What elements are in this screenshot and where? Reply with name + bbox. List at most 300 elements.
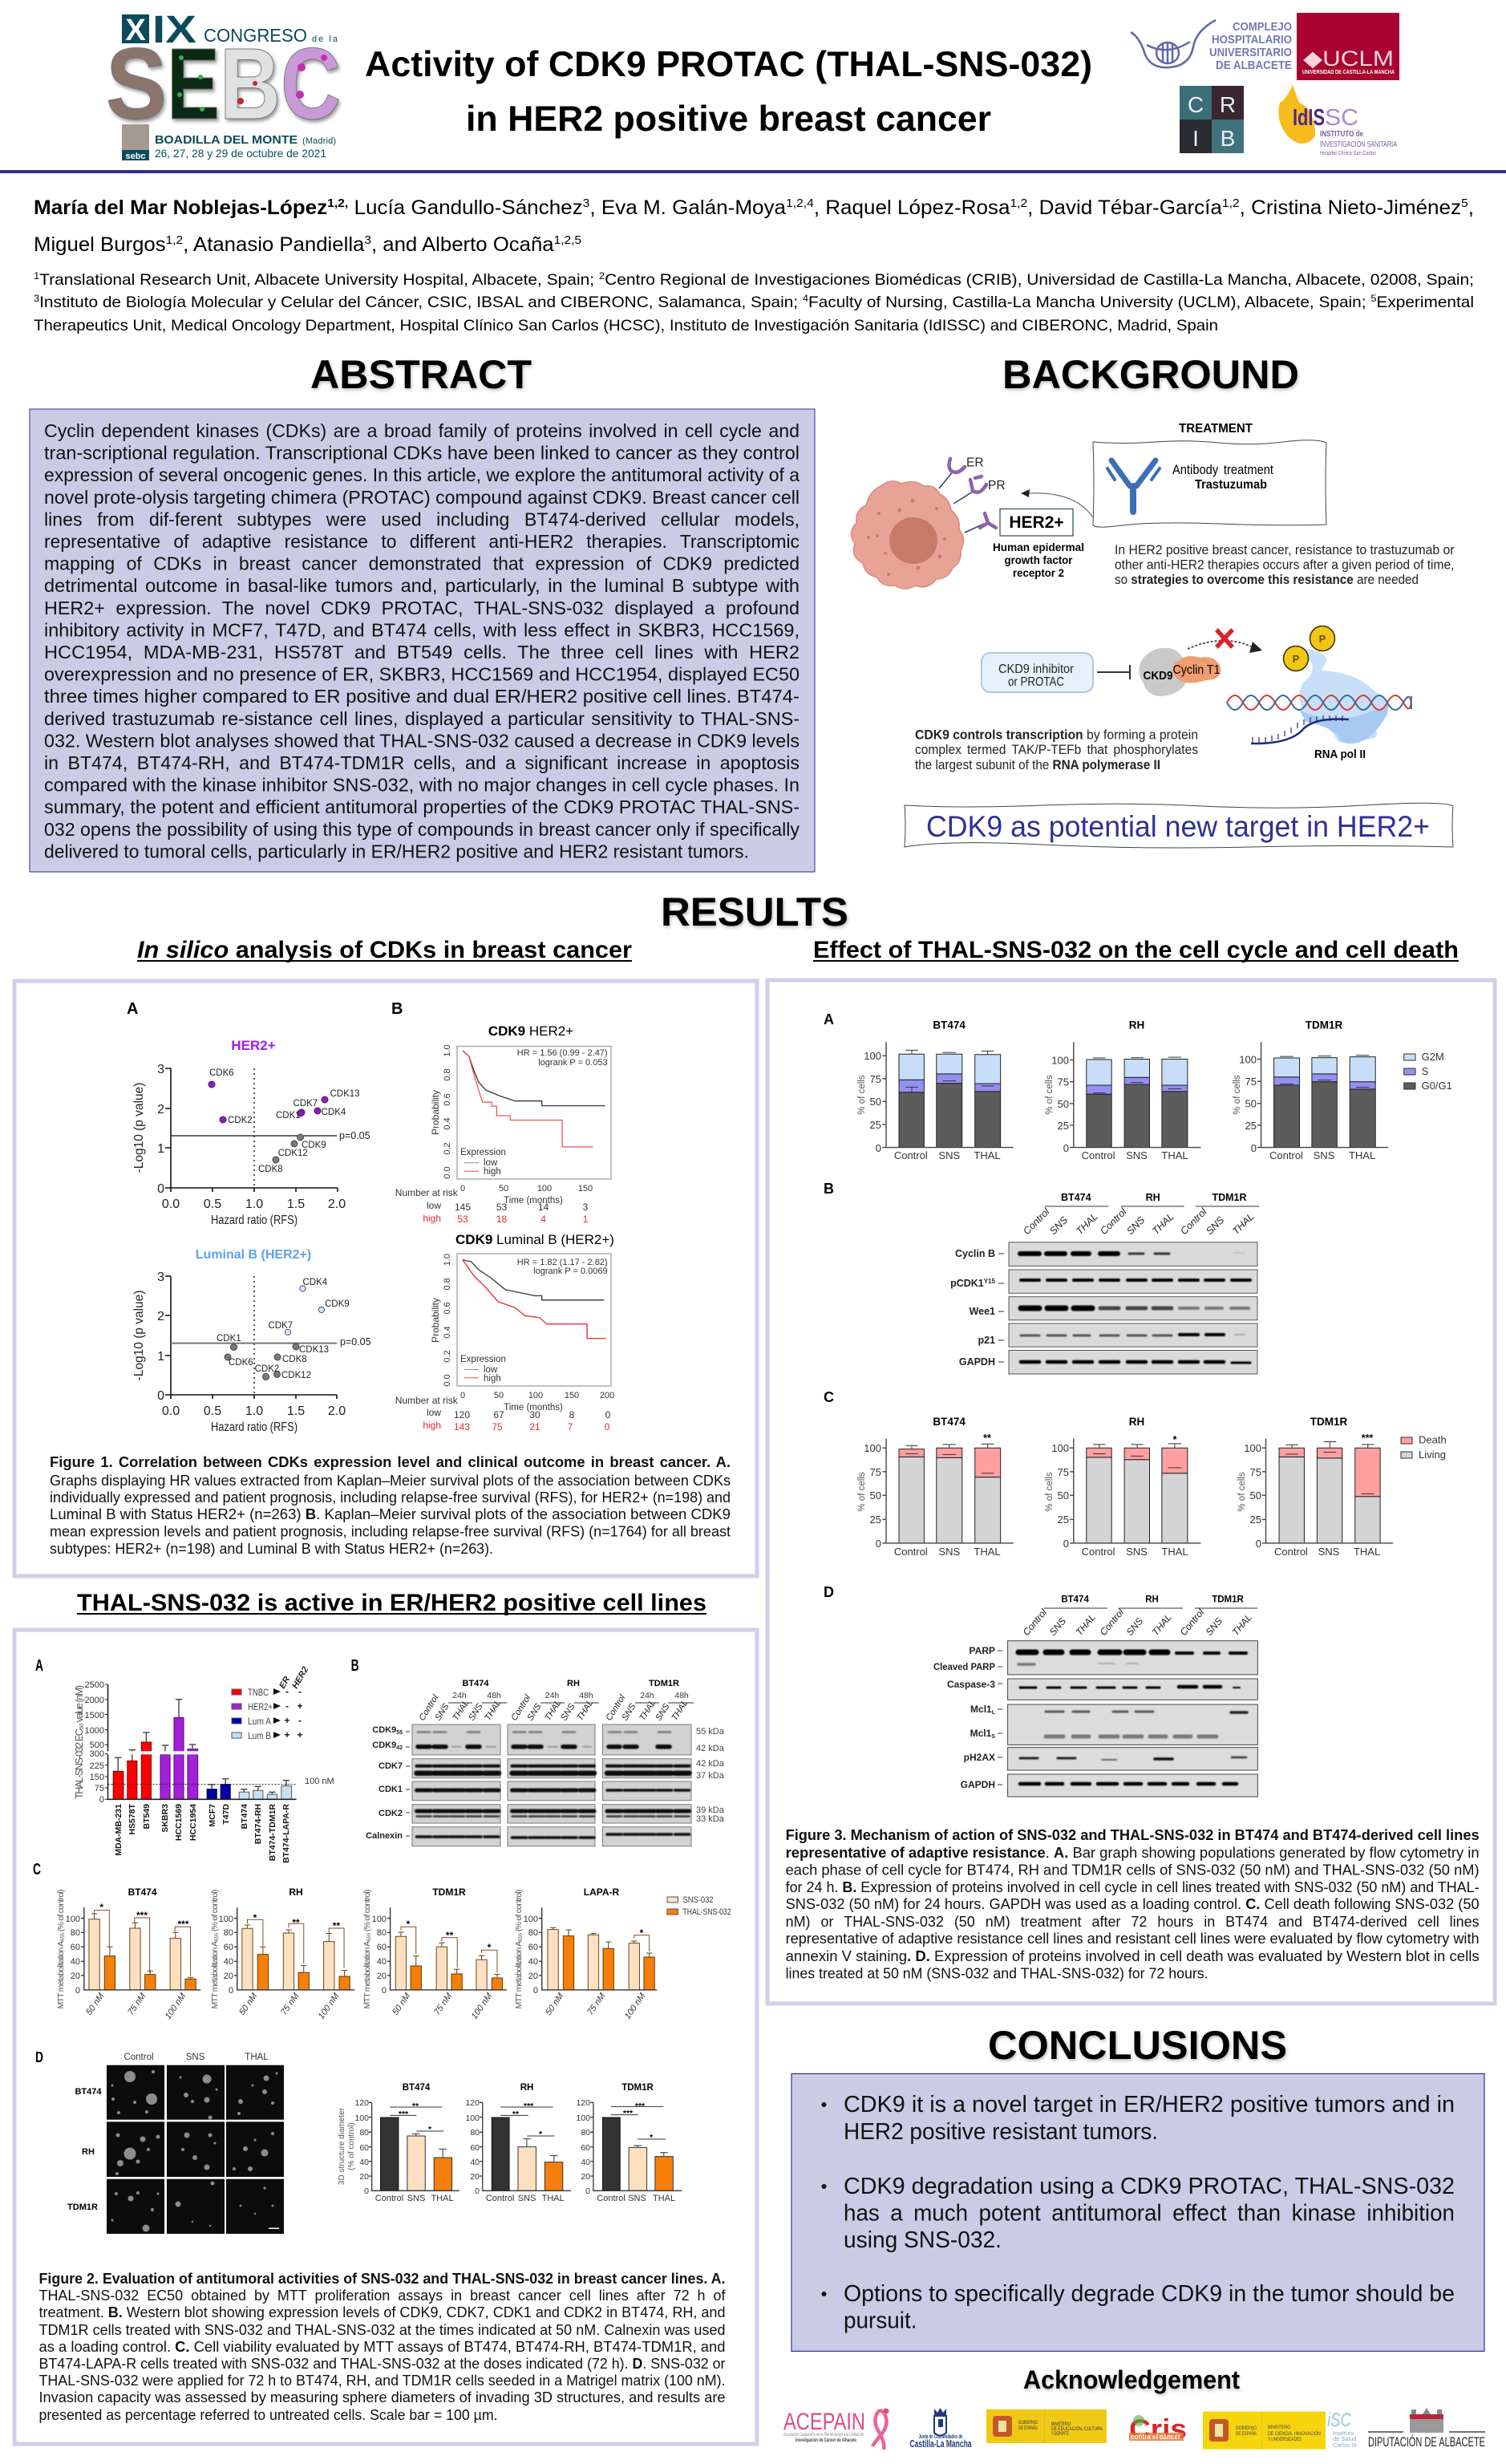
authors xyxy=(34,197,1474,256)
western blots: CDKs: Control xyxy=(417,1693,441,1723)
bar charts: MTT: BT474 xyxy=(128,1886,157,1898)
bar charts: 3D structure diameter: Control xyxy=(486,2194,514,2203)
bar chart: EC50: 100 nM xyxy=(305,1777,334,1786)
treatment box xyxy=(1093,440,1326,527)
caption: figure 2: treatment. B. Western blot showing expression levels of CDK9, CDK7, CDK1 and CDK2 in BT474, RH, and xyxy=(38,2304,725,2320)
western blots: CDKs: CDK1 xyxy=(379,1785,403,1794)
western blots: cell cycle proteins: pCDK1 xyxy=(950,1278,984,1289)
bar chart: EC50: BT474-TDM1R xyxy=(268,1804,277,1861)
micrographs: 3D invasion: RH xyxy=(82,2147,95,2157)
western blots: cell cycle proteins: SNS xyxy=(1204,1214,1227,1237)
logo: CRIB: R xyxy=(1220,92,1236,117)
caption: figure 3: representative of adaptive resistance cell lines and resistant cell lines were evaluated by flow cytometry with xyxy=(786,1931,1480,1947)
western blots: CDKs: THAL xyxy=(451,1698,471,1723)
bar charts: 3D structure diameter: 120 xyxy=(576,2098,590,2108)
logo: ACEPAIN: Asociación Caspuneña en la Piel en apoyo a la Unidad de xyxy=(783,2433,864,2438)
conclusion 1: CDK9 it is a novel target in ER/HER2 positive tumors and in xyxy=(844,2092,1455,2118)
bar charts: MTT: 80 xyxy=(377,1928,387,1938)
scatter chart: HER2+: CDK8 xyxy=(258,1165,283,1174)
survival plot: CDK9 HER2+: 145 xyxy=(455,1202,471,1213)
western blots: cell cycle proteins: THAL xyxy=(1074,1211,1100,1237)
stacked bar charts: cell death: 25 xyxy=(1250,1514,1261,1526)
authors: 3 xyxy=(583,197,589,210)
bar charts: 3D structure diameter: SNS xyxy=(628,2194,646,2203)
stacked bar charts: cell death xyxy=(857,1416,1447,1558)
text: resistance xyxy=(1115,542,1455,587)
western blots: CDKs: SNS xyxy=(654,1701,672,1723)
bar charts: MTT: 60 xyxy=(377,1943,387,1952)
affiliations: Therapeutics Unit, Medical Oncology Department, Hospital Clínico San Carlos (HCSC), Instituto de Investigación Sanitaria (IdISSC) and CIBERONC, Madrid, Spain xyxy=(34,317,1218,334)
scatter chart: Luminal B: CDK6 xyxy=(229,1358,253,1368)
western blots: CDKs: 42 kDa xyxy=(696,1759,725,1769)
panel: abstract: tran-scriptional regulation. Transcriptional CDKs have been linked to cancer as they control xyxy=(44,443,800,464)
bar charts: 3D structure diameter: (% of control) xyxy=(347,2122,356,2170)
western blots: cell death proteins: PARP xyxy=(970,1645,995,1656)
bar charts: 3D structure diameter: THAL xyxy=(431,2194,454,2203)
arrow: treatment to HER2 xyxy=(1021,489,1093,517)
stacked bar charts: cell death: 75 xyxy=(1058,1466,1069,1478)
western blots: cell death proteins: pH2AX xyxy=(964,1752,995,1763)
conclusion 1: HER2 positive resistant tumors. xyxy=(844,2119,1158,2145)
legend: cell line subtypes: + xyxy=(284,1729,290,1741)
affiliations: 1 xyxy=(34,270,40,282)
scatter chart: Luminal B: CDK9 xyxy=(325,1299,350,1309)
text: resistance: In HER2 positive breast cancer, resistance to trastuzumab or xyxy=(1115,542,1455,557)
stacked bar charts: cell cycle: % of cells xyxy=(1045,1075,1055,1115)
stacked bar charts: cell death: BT474 xyxy=(933,1416,966,1428)
scatter chart: Luminal B: 3 xyxy=(157,1270,164,1284)
CDK9 / Cyclin T1 complex: CKD9 xyxy=(1144,669,1172,683)
scatter chart: HER2+: CDK9 xyxy=(302,1141,326,1150)
scatter chart: HER2+: CDK1 xyxy=(276,1111,301,1121)
survival plot: CDK9 Luminal B: 75 xyxy=(492,1421,503,1433)
western blots: CDKs: 39 kDa xyxy=(696,1805,725,1815)
bar charts: MTT: 0 xyxy=(533,1986,538,1996)
western blots: cell death proteins: Cleaved PARP xyxy=(933,1661,995,1672)
survival plot: CDK9 Luminal B: 200 xyxy=(600,1391,614,1400)
bar charts: MTT: 100 xyxy=(372,1915,387,1924)
caption: figure 2: Invasion capacity was assessed by measuring sphere diameters of invading 3D structures, and results are xyxy=(38,2389,726,2405)
bar charts: MTT: 75 nM xyxy=(126,1991,148,2017)
stacked bar charts: cell cycle: 25 xyxy=(1245,1120,1257,1132)
scatter chart: Luminal B: CDK8 xyxy=(282,1355,307,1364)
bar charts: MTT: * xyxy=(640,1927,644,1939)
caption: figure 3: Figure 3. Mechanism of action of SNS-032 and THAL-SNS-032 in BT474 and BT474-derived cell lines xyxy=(786,1827,1480,1843)
stacked bar charts: cell death: 100 xyxy=(1244,1442,1261,1454)
stacked bar charts: cell cycle: Control xyxy=(1082,1149,1115,1161)
survival plot: CDK9 HER2+: 0.8 xyxy=(443,1068,452,1081)
bar charts: MTT: 60 xyxy=(224,1943,233,1952)
stacked bar charts: cell death: % of cells xyxy=(1237,1472,1247,1512)
scatter chart: HER2+: 0 xyxy=(157,1182,164,1196)
blocked phosphorylation arrow xyxy=(1188,630,1262,653)
survival plot: CDK9 Luminal B: 7 xyxy=(568,1421,573,1433)
logo: CRIB: B xyxy=(1221,126,1235,151)
survival plot: CDK9 HER2+: high xyxy=(484,1167,501,1177)
survival plot: CDK9 HER2+: 3 xyxy=(583,1202,589,1213)
scatter chart: HER2+: CDK7 xyxy=(294,1099,318,1108)
bar charts: MTT: 20 xyxy=(528,1972,538,1981)
bar charts: MTT: 75 nM xyxy=(585,1991,608,2017)
survival plot: CDK9 Luminal B: 30 xyxy=(529,1409,540,1420)
panel: figure 1 xyxy=(14,981,757,1576)
authors: 1,2,4 xyxy=(786,197,814,210)
scatter chart: HER2+: 2 xyxy=(157,1103,164,1116)
HER2+ label: growth factor xyxy=(1004,553,1073,566)
stacked bar charts: cell death: 75 xyxy=(1250,1466,1261,1478)
treatment box: Trastuzumab xyxy=(1195,478,1267,492)
receptor labels: ER xyxy=(966,456,984,470)
affiliations: Experimental xyxy=(1376,294,1474,311)
bar chart: EC50: 300 xyxy=(90,1749,104,1759)
bar charts: 3D structure diameter: *** xyxy=(635,2101,646,2111)
bar charts: MTT: 0 xyxy=(229,1986,233,1996)
western blots: CDKs: 48h xyxy=(487,1691,501,1700)
legend: cell cycle phases: S xyxy=(1422,1065,1429,1077)
stacked bar charts: cell death: 50 xyxy=(1250,1489,1261,1502)
survival plot: CDK9 HER2+: 0.2 xyxy=(443,1142,452,1155)
western blots: CDKs: 24h xyxy=(452,1691,467,1700)
panel: abstract: representative of adaptive resistance to different anti-HER2 therapies. Transcriptomic xyxy=(44,531,800,552)
micrographs: 3D invasion: THAL xyxy=(245,2053,269,2062)
logo: SEBC congress: BOADILLA DEL MONTE xyxy=(155,133,298,147)
bar charts: 3D structure diameter: 100 xyxy=(465,2113,480,2123)
bar charts: 3D structure diameter: RH xyxy=(520,2083,533,2093)
bar charts: 3D structure diameter: 80 xyxy=(470,2128,480,2138)
survival plot: CDK9 Luminal B: CDK9 Luminal B (HER2+) xyxy=(455,1232,614,1247)
logo: IdISSC: INSTITUTO de xyxy=(1320,129,1363,139)
scatter chart: Luminal B xyxy=(132,1248,371,1434)
logo: SEBC congress: X xyxy=(125,14,146,47)
stacked bar charts: cell death: 100 xyxy=(1051,1442,1069,1454)
legend: cell line subtypes: HER2 xyxy=(290,1665,310,1691)
logo: IdISSC: INVESTIGACIÓN SANITARIA xyxy=(1320,139,1397,149)
treatment label: TREATMENT xyxy=(1179,422,1253,436)
bar charts: 3D structure diameter: Control xyxy=(375,2194,403,2203)
stacked bar charts: cell death: Control xyxy=(1274,1546,1308,1558)
scatter chart: Luminal B: 2.0 xyxy=(328,1404,346,1418)
icon: RNA polymerase II and DNA: P xyxy=(1319,633,1326,645)
bar charts: MTT: 75 nM xyxy=(432,1991,455,2017)
survival plot: CDK9 HER2+: high xyxy=(423,1213,441,1224)
western blots: CDKs: CDK9 xyxy=(372,1725,396,1735)
heading: background: BACKGROUND xyxy=(1002,352,1299,397)
bar chart: EC50: 2500 xyxy=(85,1680,104,1690)
scatter chart: HER2+: -Log10 (p value) xyxy=(132,1083,146,1173)
bar charts: MTT: 50 nM xyxy=(237,1991,260,2017)
scatter chart: HER2+ xyxy=(132,1038,370,1227)
caption: figure 1 xyxy=(50,1454,731,1557)
scatter chart: Luminal B: CDK13 xyxy=(299,1345,329,1355)
survival plot: CDK9 HER2+: 150 xyxy=(578,1184,593,1194)
stacked bar charts: cell death: Control xyxy=(1082,1546,1115,1558)
bar charts: MTT: 100 xyxy=(524,1915,538,1924)
survival plot: CDK9 HER2+: 1 xyxy=(583,1214,589,1225)
legend: death and living: Death xyxy=(1419,1434,1447,1445)
western blots: cell death proteins: Control xyxy=(1021,1607,1049,1638)
authors: 3 xyxy=(364,233,371,247)
bar charts: 3D structure diameter: THAL xyxy=(653,2194,675,2203)
survival plot: CDK9 Luminal B: low xyxy=(427,1407,441,1418)
survival plot: CDK9 HER2+: 4 xyxy=(540,1214,546,1225)
authors: , xyxy=(1468,197,1474,219)
affiliations: 3 xyxy=(34,293,39,304)
bar chart: EC50: BT474-LAPA-R xyxy=(281,1804,291,1863)
scatter chart: HER2+: 0.0 xyxy=(162,1198,180,1211)
logo: Ministry of Science: MINISTERIO xyxy=(1268,2425,1290,2430)
panel letter A: A xyxy=(35,1657,43,1675)
scatter chart: Luminal B: 2 xyxy=(157,1310,164,1323)
micrographs: 3D invasion xyxy=(67,2053,284,2234)
heading: conclusions: CONCLUSIONS xyxy=(988,2023,1287,2068)
scatter chart: Luminal B: -Log10 (p value) xyxy=(132,1291,146,1380)
logo: CRIS contra el cancer: Cris xyxy=(1129,2414,1187,2445)
bar charts: MTT: * xyxy=(253,1912,257,1923)
western blots: cell cycle proteins: SNS xyxy=(1047,1214,1071,1237)
bar charts: 3D structure diameter: SNS xyxy=(518,2194,536,2203)
survival plot: CDK9 Luminal B: 0.6 xyxy=(443,1302,452,1315)
western blots: cell death proteins: BT474 xyxy=(1061,1595,1089,1604)
logo: Castilla-La Mancha: Castilla-La Mancha xyxy=(909,2438,972,2450)
panel: abstract: novel prote-olysis targeting chimera (PROTAC) compound against CDK9. Breast cancer cell xyxy=(44,487,800,508)
bar charts: 3D structure diameter: 0 xyxy=(364,2186,369,2196)
bar charts: MTT: *** xyxy=(136,1910,148,1921)
subheading: active: THAL-SNS-032 is active in ER/HER2 positive cell lines xyxy=(77,1590,706,1616)
logo: Ministry of Education: DE EDUCACIÓN, CULTURA xyxy=(1051,2426,1103,2432)
stacked bar charts: cell death: SNS xyxy=(938,1546,960,1558)
logo: Ministry of Science xyxy=(1203,2412,1326,2450)
logo: CRIB xyxy=(1180,86,1244,153)
heading: acknowledgement: Acknowledgement xyxy=(1023,2365,1240,2394)
HER2+ label: Human epidermal xyxy=(993,541,1084,553)
bar charts: 3D structure diameter: ** xyxy=(412,2101,419,2111)
western blots: cell death proteins: Mcl1 xyxy=(970,1704,992,1715)
western blots: CDKs: SNS xyxy=(467,1701,485,1723)
panel: conclusions xyxy=(791,2073,1484,2351)
legend: cell cycle phases xyxy=(1404,1051,1452,1092)
survival plot: CDK9 HER2+: Expression xyxy=(460,1148,506,1157)
stacked bar charts: cell death: Control xyxy=(894,1546,928,1558)
caption: figure 3: representative of adaptive resistance . A. Bar graph showing populations generated by flow cytometry in xyxy=(786,1845,1480,1861)
panel: abstract: summary, the potent and efficient antitumoral properties of the CDK9 PROTAC THAL-SNS- xyxy=(44,796,800,817)
affiliations: 2 xyxy=(599,270,605,282)
stacked bar charts: cell cycle: 50 xyxy=(1245,1097,1257,1110)
bar chart: EC50: 500 xyxy=(90,1741,104,1750)
CDK9 inhibitor box: CKD9 inhibitor xyxy=(998,663,1075,676)
logo: hospital xyxy=(1131,20,1292,72)
conclusion 1 xyxy=(821,2092,1455,2145)
bar chart: EC50: HCC1954 xyxy=(188,1804,198,1841)
scatter chart: Luminal B: 0.0 xyxy=(162,1404,180,1418)
bar chart: EC50: BT474-RH xyxy=(253,1804,263,1844)
survival plot: CDK9 HER2+: low xyxy=(484,1158,498,1168)
logo: ACEPAIN: ACEPAIN xyxy=(783,2409,865,2435)
panel: abstract: HCC1954, MDA-MB-231, HS578T and BT549 cells. The three cell lines with HER2 xyxy=(44,642,800,663)
survival plot: CDK9 Luminal B: low xyxy=(484,1365,498,1375)
western blots: CDKs: SNS xyxy=(433,1701,451,1723)
scatter chart: HER2+: CDK2 xyxy=(228,1116,253,1125)
survival plot: CDK9 Luminal B: Expression xyxy=(460,1355,506,1364)
logo: Instituto de Salud Carlos III: iSC xyxy=(1327,2409,1352,2431)
western blots: cell cycle proteins: Wee1 xyxy=(970,1306,995,1317)
scatter chart: HER2+: HER2+ xyxy=(231,1038,276,1053)
survival plot: CDK9 Luminal B: HR = 1.82 (1.17 - 2.82) xyxy=(517,1258,608,1267)
legend: cell cycle phases: G0/G1 xyxy=(1422,1080,1452,1092)
logo: hospital: DE ALBACETE xyxy=(1216,59,1292,72)
survival plot: CDK9 Luminal B: 21 xyxy=(529,1421,540,1433)
western blots: CDKs: SNS xyxy=(525,1701,544,1723)
authors: 1,2 xyxy=(1222,197,1240,210)
logo: hospital: HOSPITALARIO xyxy=(1212,34,1292,47)
caption: figure 3 xyxy=(786,1827,1480,1981)
logo: UCLM: ◆UCLM xyxy=(1303,47,1394,71)
survival plot: CDK9 HER2+: 50 xyxy=(499,1184,508,1194)
logo: hospital: UNIVERSITARIO xyxy=(1209,47,1292,59)
text: resistance: other anti-HER2 therapies occurs after a given period of time, xyxy=(1115,557,1455,573)
caption: figure 3: each phase of cell cycle for BT474, RH and TDM1R cells of SNS-032 (50 nM) and THAL-SNS-032 (50 nM) xyxy=(786,1862,1480,1878)
bar charts: 3D structure diameter: SNS xyxy=(407,2194,425,2203)
caption: figure 2: TDM1R cells treated with SNS-032 and THAL-SNS-032 at the times indicated at 50 nM. Calnexin was used xyxy=(38,2322,725,2338)
western blots: cell death proteins: RH xyxy=(1145,1595,1159,1604)
bar charts: 3D structure diameter: * xyxy=(539,2130,543,2139)
stacked bar charts: cell death: 100 xyxy=(864,1442,881,1454)
survival plot: CDK9 Luminal B: Probability xyxy=(430,1298,441,1343)
panel: abstract: lines from dif-ferent subtypes were used including BT474-derived cellular models, xyxy=(44,509,800,529)
authors: , Cristina Nieto-Jiménez xyxy=(1240,197,1461,219)
panel: figure 3 xyxy=(767,980,1495,2004)
legend: MTT series: THAL-SNS-032 xyxy=(683,1907,731,1917)
micrographs: 3D invasion: SNS xyxy=(186,2053,205,2062)
bar charts: MTT: 80 xyxy=(528,1928,538,1938)
logo: SEBC congress: B xyxy=(220,27,281,140)
stacked bar charts: cell death: 25 xyxy=(1058,1514,1069,1526)
affiliations: Centro Regional de Investigaciones Biomédicas (CRIB), Universidad de Castilla-La Mancha, Albacete, 02008, Spain; xyxy=(605,271,1474,289)
stacked bar charts: cell death: 0 xyxy=(876,1538,881,1550)
western blots: CDKs: THAL xyxy=(670,1698,690,1723)
survival plot: CDK9 Luminal B: 50 xyxy=(494,1391,504,1400)
stacked bar charts: cell cycle xyxy=(857,1019,1452,1161)
logo: SEBC congress: (Madrid) xyxy=(302,136,336,146)
bar chart: EC50: BT474 xyxy=(240,1804,249,1830)
western blots: cell cycle proteins: BT474 xyxy=(1061,1192,1091,1203)
bar charts: MTT: 100 nM xyxy=(317,1991,342,2021)
bar charts: 3D structure diameter: 3D structure diameter xyxy=(338,2107,346,2185)
survival plot: CDK9 HER2+: 18 xyxy=(496,1214,507,1225)
caption: figure 2: presented as percentage referred to untreated cells. Scale bar = 100 µm. xyxy=(38,2407,497,2423)
survival plot: CDK9 HER2+: CDK9 HER2+ xyxy=(488,1023,573,1039)
stacked bar charts: cell death: SNS xyxy=(1318,1546,1340,1558)
CDK9 inhibitor box xyxy=(982,653,1093,692)
panel letter B: B xyxy=(391,1000,403,1018)
survival plot: CDK9 Luminal B: logrank P = 0.0069 xyxy=(533,1266,608,1276)
bar charts: MTT: 80 xyxy=(71,1928,80,1938)
logo: Ministry of Science: GOBIERNO xyxy=(1236,2426,1257,2431)
logo: ACEPAIN xyxy=(783,2408,889,2450)
legend: cell line subtypes: + xyxy=(297,1700,303,1712)
scatter chart: HER2+: p=0.05 xyxy=(339,1130,370,1141)
stacked bar charts: cell death: 0 xyxy=(1256,1538,1261,1550)
icon: RNA polymerase II and DNA: RNA pol II xyxy=(1314,748,1366,761)
bar chart: EC50: 150 xyxy=(90,1773,104,1782)
bar charts: 3D structure diameter: 40 xyxy=(470,2158,480,2167)
bar charts: MTT: 40 xyxy=(528,1957,538,1967)
western blots: cell death proteins: SNS xyxy=(1204,1615,1225,1638)
bar charts: MTT xyxy=(56,1886,731,2021)
bar charts: MTT: *** xyxy=(177,1919,189,1930)
stacked bar charts: cell death: 25 xyxy=(870,1514,881,1526)
subheading: in silico: In silico analysis of CDKs in breast cancer xyxy=(137,937,632,963)
logo: Ministry of Education: Y DEPORTE xyxy=(1051,2432,1069,2437)
scatter chart: Luminal B: CDK4 xyxy=(303,1278,328,1287)
western blots: cell death proteins: THAL xyxy=(1230,1611,1254,1638)
scatter chart: HER2+: 2.0 xyxy=(328,1198,346,1211)
bar charts: 3D structure diameter: *** xyxy=(524,2101,534,2111)
western blots: cell death proteins: SNS xyxy=(1047,1615,1068,1638)
western blots: CDKs: CDK9 xyxy=(372,1741,396,1750)
header rule xyxy=(0,170,1506,173)
caption: figure 1: mean expression levels and patient prognosis, including relapse-free survival (RFS) (n=1764) for all breast xyxy=(50,1524,731,1540)
treatment box: Antibody treatment xyxy=(1172,463,1273,477)
survival plot: CDK9 HER2+: logrank P = 0.053 xyxy=(538,1058,608,1068)
stacked bar charts: cell cycle: 0 xyxy=(876,1142,881,1154)
logo: Instituto de Salud Carlos III xyxy=(1327,2409,1357,2449)
western blots: cell cycle proteins: Control xyxy=(1021,1206,1052,1237)
scatter chart: HER2+: CDK4 xyxy=(322,1108,346,1117)
panel: abstract: HER2+ expression. The novel CDK9 PROTAC, THAL-SNS-032 displayed a profound xyxy=(44,598,800,618)
western blots: CDKs: RH xyxy=(567,1679,580,1688)
western blots: cell death proteins: GAPDH xyxy=(961,1779,995,1790)
caption: figure 1: Luminal B with Status HER2+ (n=263) B. Kaplan–Meier survival plots of the association between CDK9 xyxy=(50,1506,731,1522)
survival plot: CDK9 HER2+: Time (months) xyxy=(504,1196,563,1206)
bar charts: MTT: 80 xyxy=(224,1928,233,1938)
caption: figure 2: Figure 2. Evaluation of antitumoral activities of SNS-032 and THAL-SNS-032 in breast cancer lines. A. xyxy=(38,2271,725,2287)
panel: background xyxy=(851,422,1455,848)
survival plot: CDK9 HER2+: 14 xyxy=(538,1202,549,1213)
western blots: CDKs: 48h xyxy=(579,1691,593,1700)
legend: cell line subtypes: - xyxy=(298,1686,302,1697)
stacked bar charts: cell cycle: 25 xyxy=(870,1119,881,1131)
stacked bar charts: cell death: % of cells xyxy=(1045,1472,1055,1512)
bar charts: 3D structure diameter: Control xyxy=(597,2194,625,2203)
western blots: CDKs: 24h xyxy=(640,1691,654,1700)
western blots: CDKs: THAL xyxy=(638,1698,658,1723)
bar charts: 3D structure diameter: 20 xyxy=(359,2172,369,2182)
bar charts: MTT: 100 nM xyxy=(470,1991,495,2021)
stacked bar charts: cell cycle: 75 xyxy=(1245,1076,1257,1088)
authors: 5 xyxy=(1461,197,1468,210)
bar charts: MTT: 40 xyxy=(377,1957,387,1967)
logo: SEBC congress: de la xyxy=(312,34,338,44)
affiliations: Faculty of Nursing, Castilla-La Mancha University (UCLM), Albacete, Spain; xyxy=(808,294,1370,311)
western blots: CDKs: 55 kDa xyxy=(696,1727,725,1737)
survival plot: CDK9 HER2+: 53 xyxy=(496,1202,507,1213)
survival plot: CDK9 Luminal B: 120 xyxy=(454,1409,470,1420)
legend: cell line subtypes: - xyxy=(285,1686,289,1697)
CDK9 / Cyclin T1 complex xyxy=(1139,648,1221,696)
bar charts: 3D structure diameter: 80 xyxy=(581,2128,590,2138)
logo: SEBC congress: E xyxy=(167,27,220,140)
survival plot: CDK9 Luminal B: 143 xyxy=(454,1421,470,1433)
title: Activity of CDK9 PROTAC (THAL-SNS-032) xyxy=(365,45,1092,84)
authors: , Atanasio Pandiella xyxy=(183,233,364,256)
bar charts: MTT: 100 xyxy=(66,1915,80,1924)
text: resistance: so strategies to overcome this resistance are needed xyxy=(1115,572,1419,587)
scatter chart: HER2+: 1 xyxy=(157,1142,164,1156)
scatter chart: Luminal B: CDK12 xyxy=(281,1371,311,1380)
bar charts: MTT: LAPA-R xyxy=(584,1886,620,1898)
western blots: cell death proteins: S xyxy=(991,1734,995,1740)
bar charts: MTT: MTT metabolitation A₅₅₅ (% of control) xyxy=(56,1889,66,2009)
